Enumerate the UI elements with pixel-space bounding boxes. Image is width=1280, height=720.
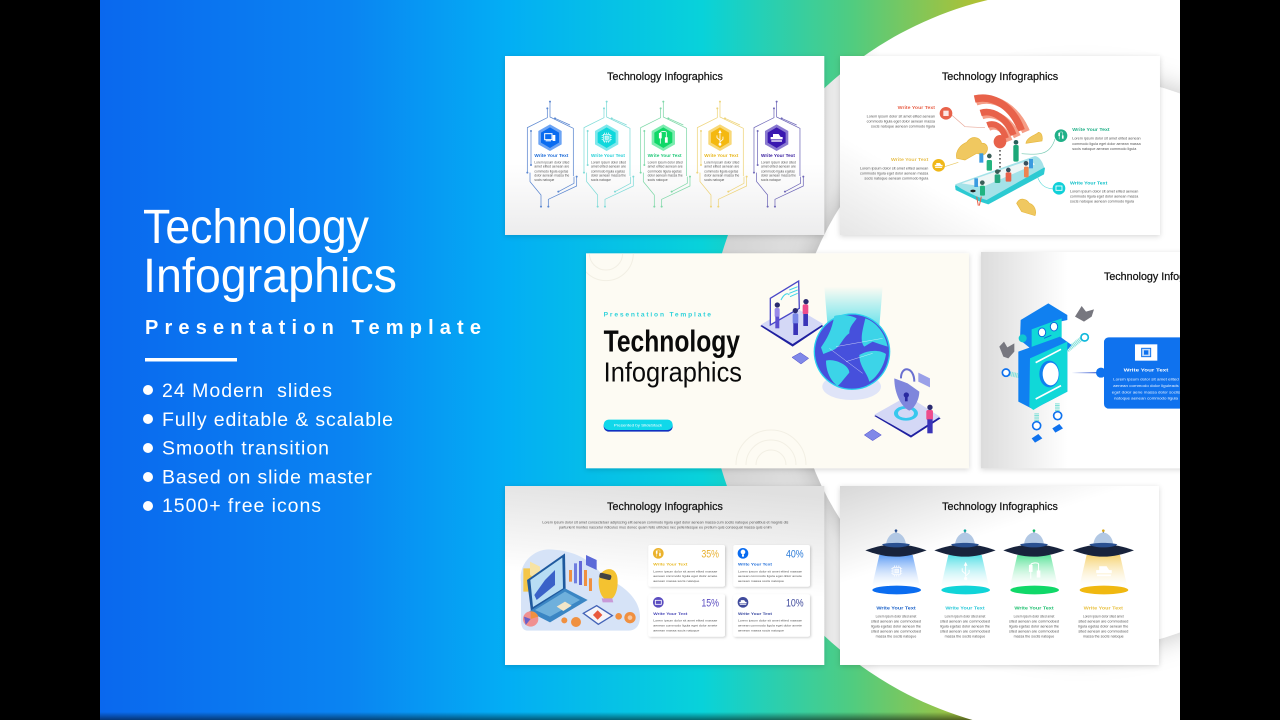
slide: percentages and laptop xyxy=(505,486,824,665)
text: green callout: Lorem ipsum dolor sit amet elited aenean xyxy=(1072,137,1141,141)
stat card: 35%: Write Your Text xyxy=(653,562,688,567)
ufo: green xyxy=(1003,529,1065,639)
ufo: blue: massa the sociis natoque xyxy=(876,635,917,639)
text: green callout xyxy=(1072,127,1141,151)
callout card: Write Your Text xyxy=(1124,368,1169,374)
text: red callout: Write Your Text xyxy=(898,105,936,110)
illustration: globe xyxy=(814,313,890,400)
stat card: 10% xyxy=(733,594,810,637)
illustration: shield platform xyxy=(874,369,941,438)
feature bullet list: 1500+ free icons xyxy=(162,495,321,517)
column: green: commodo ligula egetas xyxy=(648,169,682,173)
ufo: yellow xyxy=(1073,529,1134,639)
ufo: green: Lorem ipsum dolor sited amet xyxy=(1014,615,1054,619)
ufo: green: massa the sociis natoque xyxy=(1014,635,1055,639)
ufo: cyan xyxy=(934,529,996,639)
icon: green callout xyxy=(1055,129,1067,142)
stat card: 40%: Write Your Text xyxy=(738,562,773,567)
text: yellow callout: socis natoque aenean commodo ligula xyxy=(864,177,929,181)
illustration: wifi symbol xyxy=(975,98,1026,148)
ufo: cyan: ligula egetas dolor aenean the xyxy=(940,625,990,629)
ufo: green: Write Your Text xyxy=(1014,605,1054,610)
intro paragraph: Lorem ipsum dolor sit amet consectetuer adipiscing elit aenean commodo ligula eget dolor aenean massa cum sociis natoque penatibus et magnis dis xyxy=(542,520,789,524)
title xyxy=(604,325,742,388)
ufo: blue: sited aenean are commodoed xyxy=(871,620,921,624)
text: green callout: Write Your Text xyxy=(1072,127,1110,132)
ufo: green: sited aenean are commodoed xyxy=(1009,630,1059,634)
column: yellow: dolor aenean massa the xyxy=(704,174,740,178)
ufo: blue: ligula egetas dolor aenean the xyxy=(871,625,921,629)
illustration: left platform with people xyxy=(760,281,823,347)
icon: yellow callout xyxy=(932,159,945,172)
callout card: aenean commodo dolor liguleads xyxy=(1113,384,1179,388)
column: blue: Write Your Text xyxy=(534,153,569,158)
slide: circuit hexagons xyxy=(505,56,824,235)
stat card: 15% xyxy=(648,594,725,637)
stat card: 35%: aenean massa socis natoque xyxy=(653,579,700,583)
decorative rings xyxy=(586,253,806,465)
ufo: green: sited aenean are commodoed xyxy=(1009,620,1059,624)
slide: wifi and smartphone: Technology Infographics xyxy=(942,71,1059,83)
ufo: yellow: sited aenean are commodoed xyxy=(1078,630,1129,634)
text: cyan callout: commodo ligula eget dolor aenean massa xyxy=(1070,195,1139,199)
feature bullet list xyxy=(143,380,393,517)
slide: ufo beams xyxy=(840,486,1159,665)
column: purple: Write Your Text xyxy=(761,153,796,158)
column: cyan xyxy=(583,101,634,208)
stat card: 40%: aenean massa socis natoque xyxy=(738,579,784,583)
column: cyan: Write Your Text xyxy=(591,153,626,158)
column: purple xyxy=(753,101,804,208)
ufo: blue: Lorem ipsum dolor sited amet xyxy=(876,615,916,619)
stat card: 40%: Lorem ipsum dolor sit amet elited massae xyxy=(738,569,802,573)
text: red callout: socis natoque aenean commodo ligula xyxy=(871,125,935,129)
main title: Technology xyxy=(143,201,369,254)
text: red callout: commodo ligula eget dolor aenean massa xyxy=(867,120,935,124)
callout card: natoque aenean commodo ligula xyxy=(1114,396,1178,400)
ufo: blue: sited aenean are commodoed xyxy=(871,630,921,634)
callout connectors xyxy=(945,115,1055,189)
column: green xyxy=(640,101,691,208)
column: green: amet elited aenean are xyxy=(648,165,683,169)
feature bullet list: Smooth transition xyxy=(162,438,329,460)
stat card: 15%: Write Your Text xyxy=(653,611,688,616)
slide: central title slide xyxy=(584,252,971,472)
icon: cyan callout xyxy=(1053,182,1065,195)
column: blue: commodo ligula egetas xyxy=(534,169,569,173)
feature bullet list: Fully editable & scalable xyxy=(162,409,393,431)
intro paragraph xyxy=(542,520,789,530)
stat card: 15%: aenean massa socis natoque xyxy=(653,628,700,632)
column: yellow: Write Your Text xyxy=(704,153,739,158)
text: green callout: socis natoque aenean commodo ligula xyxy=(1072,147,1137,151)
ufo: blue xyxy=(865,529,927,639)
column: blue: socis natoque xyxy=(534,178,555,182)
column: blue: Lorem ipsum dolor sited xyxy=(534,160,570,164)
illustration: robot xyxy=(999,303,1094,443)
ufo: yellow: Write Your Text xyxy=(1084,605,1124,610)
text: cyan callout: socis natoque aenean commodo ligula xyxy=(1070,200,1134,204)
stat card: 35% xyxy=(648,545,725,587)
illustration: people xyxy=(970,140,1033,206)
stat card: 10%: Write Your Text xyxy=(738,611,773,616)
ufo: cyan: sited aenean are commodoed xyxy=(940,620,990,624)
illustration: floating chips xyxy=(792,353,881,441)
text: yellow callout: Lorem ipsum dolor sit amet elited aenean xyxy=(860,166,929,170)
stat card: 15%: aenean commodo ligula eget dolor amete xyxy=(653,623,718,627)
stat card: 10%: aenean massa socis natoque xyxy=(738,628,784,632)
stat card: 35%: aenean commodo ligula eget dolor amete xyxy=(653,574,718,578)
icon: red callout xyxy=(940,107,952,120)
slide: wifi and smartphone xyxy=(840,56,1160,235)
column: yellow: Lorem ipsum dolor sited xyxy=(704,160,740,164)
stat card: 35%: 35% xyxy=(701,549,719,561)
title: Technology xyxy=(604,325,740,359)
column: green: socis natoque xyxy=(648,178,668,182)
main title: Infographics xyxy=(143,250,397,303)
ufo: yellow: sited aenean are commodoed xyxy=(1078,620,1129,624)
illustration: laptop and robot xyxy=(521,549,640,631)
column: cyan: commodo ligula egetas xyxy=(591,169,625,173)
ufo: yellow: massa the sociis natoque xyxy=(1083,635,1124,639)
text: yellow callout: commodo ligula eget dolor aenean massa xyxy=(860,172,929,176)
subtitle: Presentation Template xyxy=(145,317,481,339)
slide: percentages and laptop: Technology Infographics xyxy=(607,501,723,513)
illustration: clouds xyxy=(956,132,1042,216)
ufo: cyan: massa the sociis natoque xyxy=(945,635,986,639)
ufo: blue: Write Your Text xyxy=(876,605,916,610)
column: cyan: amet elited aenean are xyxy=(591,165,626,169)
slide: robot callout: Technology Infographics xyxy=(1104,271,1220,283)
left text block xyxy=(143,201,481,517)
divider rule xyxy=(145,358,237,362)
subtitle: Presentation Template xyxy=(604,311,711,318)
column: cyan: socis natoque xyxy=(591,178,611,182)
ufo: cyan: Lorem ipsum dolor sited amet xyxy=(945,615,985,619)
feature bullet list: 24 Modern slides xyxy=(162,380,332,402)
column: blue xyxy=(526,101,578,208)
text: cyan callout: Lorem ipsum dolor sit amet elited aenean xyxy=(1070,189,1139,193)
stat card: 35%: Lorem ipsum dolor sit amet elited massae xyxy=(653,569,718,573)
column: yellow xyxy=(696,101,748,208)
ufo: green: ligula egetas dolor aenean the xyxy=(1009,625,1059,629)
stat card: 40%: 40% xyxy=(786,549,804,561)
text: red callout xyxy=(867,105,936,129)
ufo: yellow: ligula egetas dolor aenean the xyxy=(1078,625,1129,629)
button: Presented by SlideStack xyxy=(614,423,662,427)
column: purple: commodo ligula egetas xyxy=(761,169,795,173)
callout card xyxy=(1096,337,1204,409)
stat card: 15%: 15% xyxy=(701,597,719,609)
stat card: 40% xyxy=(733,545,810,587)
stat card: 10%: 10% xyxy=(786,597,804,609)
connector line xyxy=(1072,372,1098,373)
illustration: data beam xyxy=(824,287,883,327)
callout card: Lorem ipsum dolor sit amet elited xyxy=(1113,378,1179,382)
column: yellow: commodo ligula egetas xyxy=(704,169,739,173)
column: cyan: dolor aenean massa the xyxy=(591,174,626,178)
column: purple: dolor aenean massa the xyxy=(761,174,796,178)
text: yellow callout: Write Your Text xyxy=(891,157,929,162)
column: green: dolor aenean massa the xyxy=(648,174,683,178)
stat card: 10%: Lorem ipsum dolor sit amet elited massae xyxy=(738,619,802,623)
intro paragraph: parturient montes nascetur ridiculus mus donec quam felis ultricies nec pellentesque eu pretium quis consequat massa quis enim xyxy=(559,526,772,530)
illustration: phone xyxy=(955,150,1045,204)
text: yellow callout xyxy=(860,157,929,181)
column: cyan: Lorem ipsum dolor sited xyxy=(591,160,626,164)
slide: ufo beams: Technology Infographics xyxy=(942,501,1058,513)
feature bullet list: Based on slide master xyxy=(162,466,372,488)
column: yellow: socis natoque xyxy=(704,178,725,182)
text: green callout: commodo ligula eget dolor aenean massa xyxy=(1072,142,1141,146)
column: green: Lorem ipsum dolor sited xyxy=(648,160,683,164)
main title xyxy=(143,201,397,303)
button xyxy=(604,420,673,432)
ufo: cyan: Write Your Text xyxy=(945,605,985,610)
title: Infographics xyxy=(604,357,742,388)
column: yellow: amet elited aenean are xyxy=(704,165,740,169)
stat card: 10%: aenean commodo ligula eget dolor amete xyxy=(738,623,802,627)
stat card: 15%: Lorem ipsum dolor sit amet elited massae xyxy=(653,619,718,623)
column: purple: socis natoque xyxy=(761,178,781,182)
stat card: 40%: aenean commodo ligula eget dolor amete xyxy=(738,574,802,578)
text: cyan callout xyxy=(1070,180,1139,204)
slide: circuit hexagons: Technology Infographics xyxy=(607,71,723,83)
column: purple: amet elited aenean are xyxy=(761,165,796,169)
column: blue: amet elited aenean are xyxy=(534,165,570,169)
column: blue: dolor aenean massa the xyxy=(534,174,570,178)
text: red callout: Lorem ipsum dolor sit amet elited aenean xyxy=(867,114,935,118)
column: green: Write Your Text xyxy=(648,153,682,158)
callout card: eget dolor aene massa dolor sociis xyxy=(1112,390,1180,394)
text: cyan callout: Write Your Text xyxy=(1070,180,1108,185)
ufo: cyan: sited aenean are commodoed xyxy=(940,630,990,634)
slide: robot callout xyxy=(981,252,1220,468)
column: purple: Lorem ipsum dolor sited xyxy=(761,160,796,164)
ufo: yellow: Lorem ipsum dolor sited amet xyxy=(1083,615,1124,619)
